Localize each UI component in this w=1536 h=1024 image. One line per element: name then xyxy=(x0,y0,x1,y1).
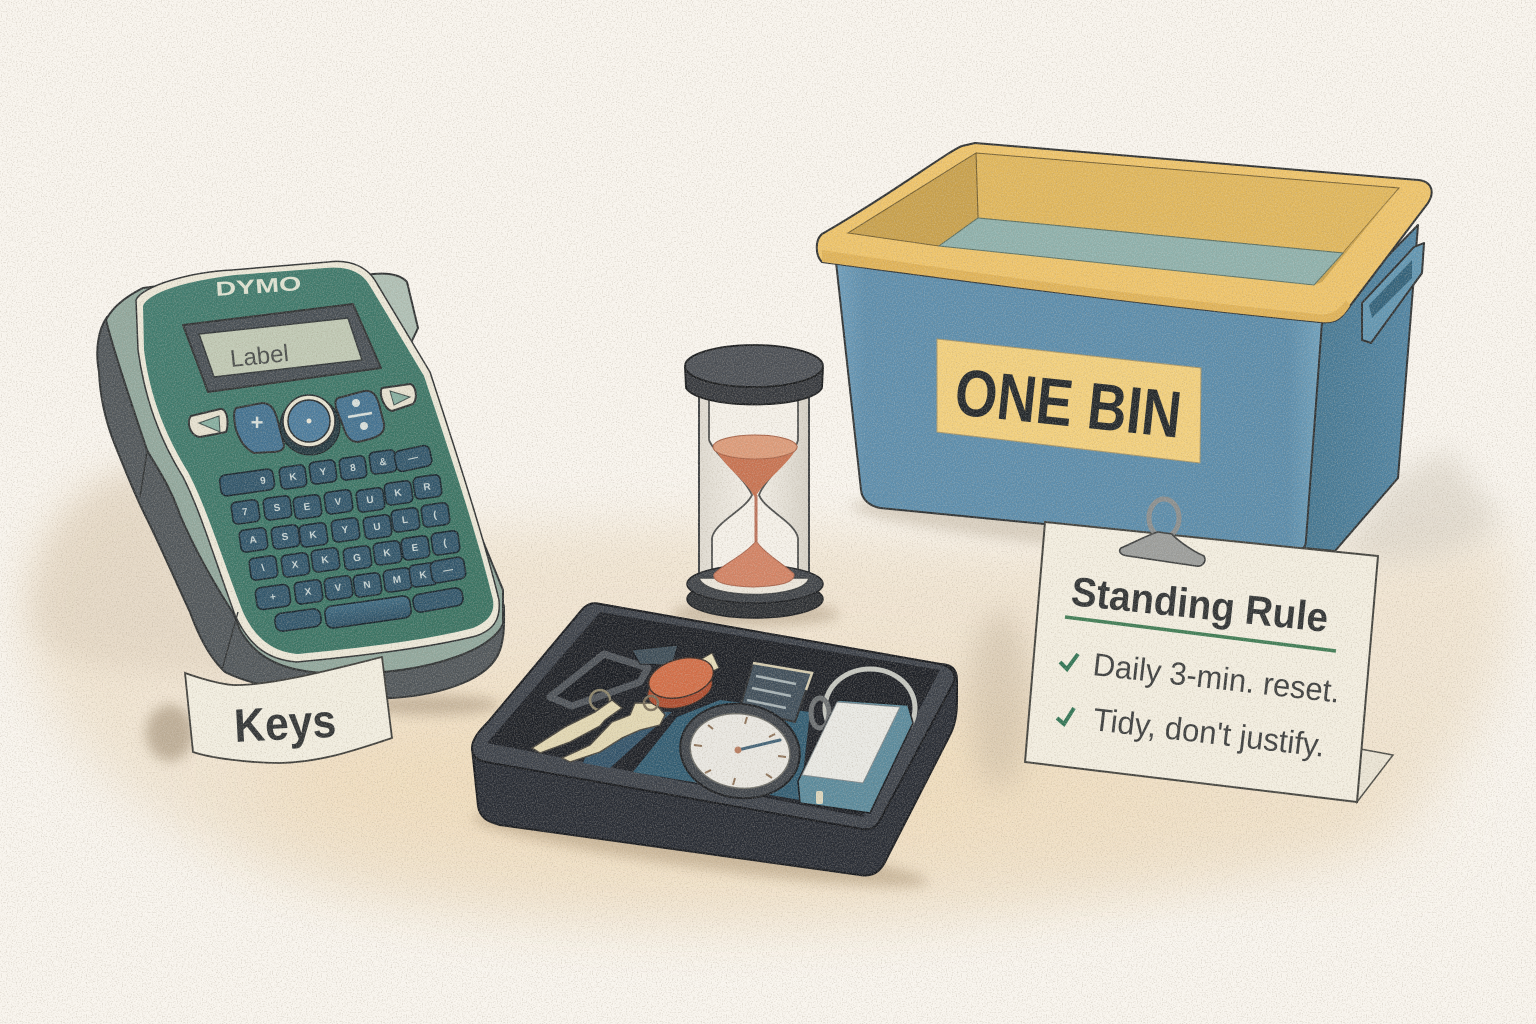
keyboard: + xyxy=(269,592,277,603)
bin interior left wall xyxy=(848,153,978,246)
rule two: Tidy, don't justify. xyxy=(1091,701,1327,764)
keyboard: X xyxy=(304,587,312,598)
metal clip xyxy=(1120,499,1205,566)
keyboard: A xyxy=(249,535,257,546)
display screen with text: Label xyxy=(229,340,290,373)
fraction button xyxy=(335,391,384,442)
bin label: ONE BIN: ONE BIN xyxy=(952,354,1185,452)
sign card xyxy=(1025,522,1378,802)
cream edge of face xyxy=(136,261,499,662)
keyring clip xyxy=(632,645,678,665)
keyboard: Y xyxy=(341,525,349,536)
keyboard xyxy=(219,444,467,632)
paper tag: Keys: Keys xyxy=(233,694,337,752)
dark outer shell xyxy=(97,290,504,698)
brand: DYMO: DYMO xyxy=(215,273,302,301)
keyboard: Y xyxy=(319,467,327,478)
plus button: + xyxy=(251,410,263,435)
keyboard: V xyxy=(334,497,342,508)
keyboard: 9 xyxy=(260,475,267,487)
heading underline xyxy=(1065,617,1336,651)
keyboard: K xyxy=(383,547,392,559)
check mark two xyxy=(1057,708,1074,724)
bin handle xyxy=(1362,243,1424,343)
padlock ring xyxy=(825,669,915,747)
blue pad right xyxy=(633,700,810,800)
keyboard: K xyxy=(289,471,298,483)
keyboard: L xyxy=(401,515,409,526)
chain link xyxy=(811,698,829,728)
keyboard: K xyxy=(309,529,318,541)
catch-all tray xyxy=(472,603,957,875)
dial button xyxy=(280,395,340,455)
keyboard: K xyxy=(419,569,428,581)
upper sand xyxy=(713,435,798,498)
keyboard: M xyxy=(392,574,402,587)
keyboard: 8 xyxy=(350,463,357,474)
keyboard: 7 xyxy=(242,507,249,518)
keyboard: U xyxy=(373,522,381,533)
bin rim xyxy=(817,143,1432,322)
key one xyxy=(532,690,622,753)
keyboard: V xyxy=(334,583,342,594)
top cap xyxy=(685,345,823,404)
lower sand xyxy=(714,541,794,587)
base xyxy=(687,565,823,618)
keyboard: & xyxy=(379,457,387,468)
tape cartridge xyxy=(365,274,418,345)
keyboard: — xyxy=(407,452,419,465)
bin interior right wall xyxy=(1314,188,1399,285)
sign heading: Standing Rule xyxy=(1069,568,1330,641)
wrist watch xyxy=(674,663,812,806)
keyboard: K xyxy=(394,487,403,499)
keyboard: ( xyxy=(443,538,448,549)
background: tabletop shadow pool xyxy=(25,450,1513,928)
sage shell xyxy=(106,264,503,674)
green keypad face xyxy=(143,268,493,654)
display screen with text xyxy=(199,318,362,377)
bin interior floor xyxy=(939,218,1343,285)
left arrow button xyxy=(189,409,228,437)
keyboard: E xyxy=(411,543,419,554)
falling sand xyxy=(754,495,758,545)
keyboard: U xyxy=(366,495,374,506)
hourglass xyxy=(685,345,823,618)
plus button xyxy=(234,403,284,453)
orange key fob xyxy=(643,651,719,715)
keyboard: \ xyxy=(261,563,265,574)
glass cylinder xyxy=(699,390,809,580)
black key loop xyxy=(550,654,648,706)
keyboard: ( xyxy=(433,510,438,521)
plastic storage bin xyxy=(817,143,1432,551)
paper tag: Keys xyxy=(185,657,392,763)
teal card box xyxy=(798,700,913,813)
bin front panel xyxy=(836,262,1322,549)
white card top xyxy=(802,702,900,783)
sign: Standing Rule xyxy=(1025,499,1393,802)
key two xyxy=(562,703,665,762)
tray inner well xyxy=(487,612,940,817)
tray rim xyxy=(472,603,954,829)
shell seam lines xyxy=(140,452,238,670)
tray outer front xyxy=(472,604,957,875)
check mark one xyxy=(1060,654,1078,669)
keyboard: S xyxy=(273,503,281,514)
Dymo label maker xyxy=(97,261,504,698)
display bezel xyxy=(183,304,381,392)
keyboard: N xyxy=(363,580,371,591)
sign back fold xyxy=(1355,748,1393,802)
keyboard: G xyxy=(352,552,362,564)
keyboard: S xyxy=(281,532,289,543)
keyboard: K xyxy=(321,554,330,566)
keyboard: R xyxy=(423,481,432,493)
keyboard: E xyxy=(303,502,311,513)
rule one: Daily 3-min. reset. xyxy=(1091,646,1342,710)
keyboard: X xyxy=(291,560,299,571)
bin side panel xyxy=(1304,225,1418,551)
right arrow button xyxy=(381,384,416,411)
blue pad left xyxy=(583,712,672,768)
bin interior back wall xyxy=(976,153,1399,253)
keyboard: — xyxy=(442,564,454,577)
